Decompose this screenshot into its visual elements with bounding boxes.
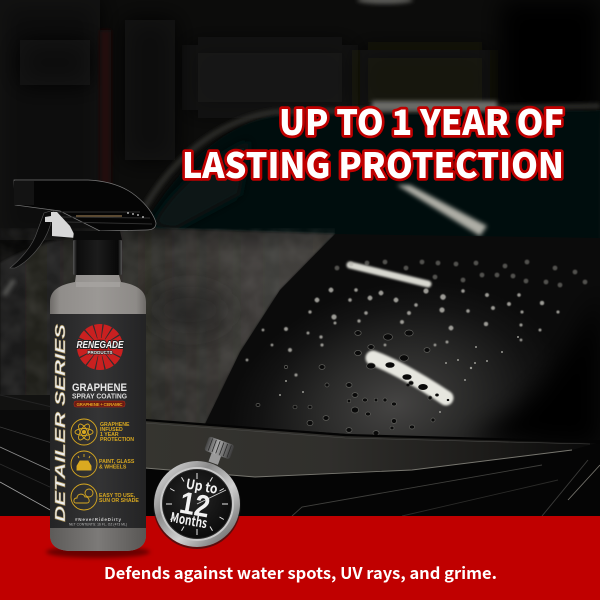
lower car panels and lines [145, 420, 600, 517]
car hood: textured panel [0, 228, 335, 430]
feature text: easy to use [99, 493, 139, 504]
product bottle: SPRAY COATING [72, 392, 127, 400]
series text: DETAILER SERIES [53, 323, 69, 522]
spray trigger head [10, 180, 156, 268]
icon: sun and cloud [71, 484, 97, 510]
feature text: graphene infused: INFUSED [100, 427, 123, 433]
bottle base [50, 528, 146, 551]
feature text: easy to use: SUN OR SHADE [99, 498, 139, 504]
feature text: graphene infused: 1 YEAR [100, 432, 119, 438]
headline: UP TO 1 YEAR OF [279, 95, 564, 146]
brand logo [76, 324, 124, 370]
hashtag: #NeverRideDirty [75, 517, 121, 522]
bottle shadow [46, 546, 150, 558]
lower left car body [0, 395, 52, 517]
feature text: paint glass wheels: & WHEELS [99, 464, 127, 470]
stopwatch hand [197, 490, 226, 504]
stopwatch badge [153, 436, 241, 549]
red footer band [0, 516, 600, 600]
stopwatch ticks [166, 473, 228, 535]
footer caption: Defends against water spots, UV rays, and grime. [104, 560, 497, 584]
car hood: glossy panel [205, 234, 600, 446]
feature text: graphene infused: PROTECTION [100, 437, 134, 443]
brand logo: PRODUCTS [88, 350, 112, 355]
feature text: graphene infused: GRAPHENE [100, 422, 130, 428]
feature text: paint glass wheels: PAINT, GLASS [99, 459, 135, 465]
headline [182, 95, 564, 189]
product bottle [10, 180, 156, 551]
feature text: easy to use: EASY TO USE, [99, 493, 136, 499]
bottle body [50, 275, 146, 551]
stopwatch crown [201, 436, 235, 468]
bottle label [50, 314, 146, 528]
brand logo: RENEGADE [76, 340, 124, 351]
stopwatch text: 12 [177, 485, 213, 524]
water droplets [246, 260, 587, 435]
bottle cap [73, 240, 122, 275]
product name: GRAPHENE [72, 382, 127, 394]
headline: LASTING PROTECTION [182, 138, 564, 189]
car windshield and roof [140, 101, 600, 245]
stopwatch text [169, 472, 220, 532]
stopwatch face [163, 470, 231, 538]
icon: car [71, 451, 97, 477]
graphene ceramic pill: GRAPHENE + CERAMIC [76, 402, 123, 407]
feature text: graphene infused [100, 422, 134, 443]
icon: atom [71, 419, 97, 445]
stopwatch text: Up to [185, 472, 220, 498]
net contents: NET CONTENTS: 16 FL. OZ (473 ML) [69, 522, 127, 526]
stopwatch text: Months [169, 506, 209, 532]
feature text: paint glass wheels [99, 459, 135, 470]
